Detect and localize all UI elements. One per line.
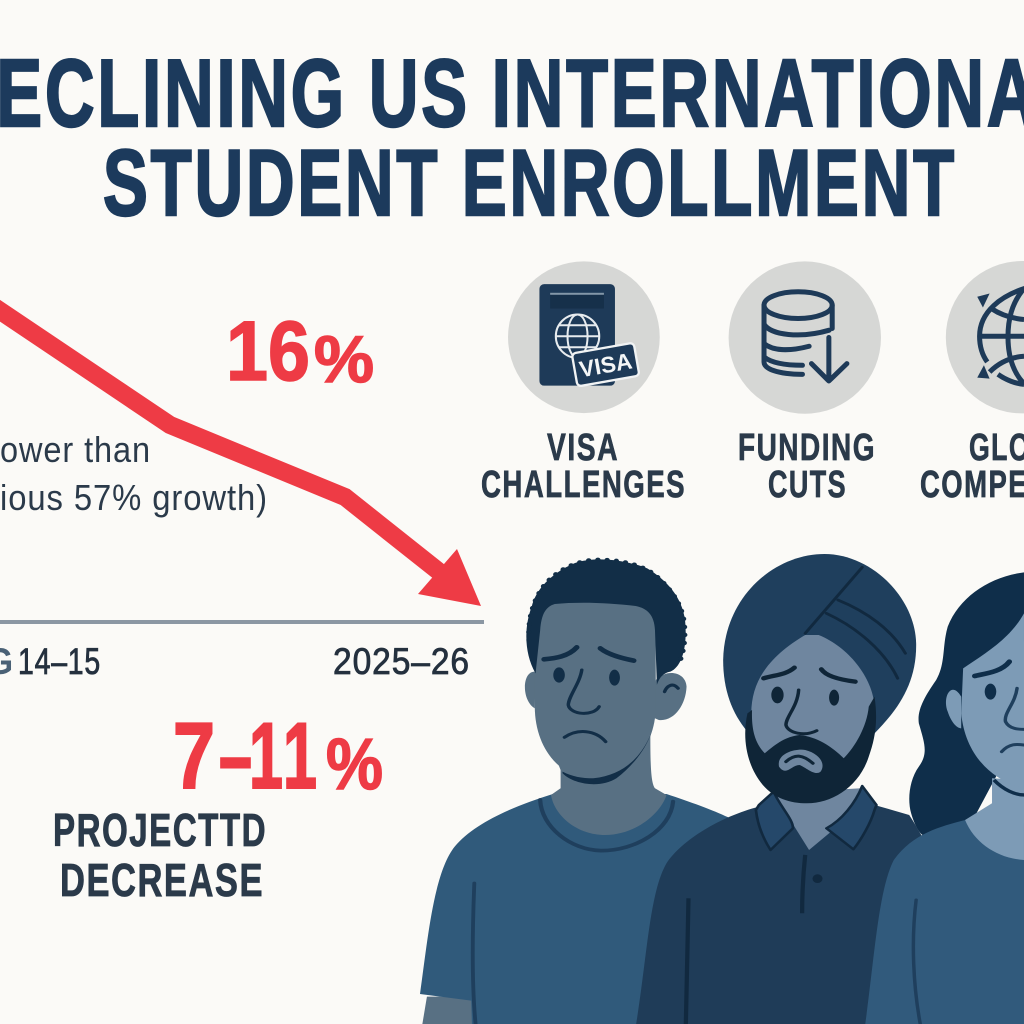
stat: 7-11%: 1 [249,703,283,808]
stat: 7-11%: % [326,725,383,805]
stat: 7-11%: 7 [173,703,215,808]
label: funding cuts [738,427,876,506]
chart axis [0,620,484,624]
person: man with turban and beard [636,554,928,1024]
note: lower than previous growth: ious 57% growth) [0,477,268,518]
person: woman [865,613,1024,1024]
stat: 7-11%: 1 [283,703,317,808]
axis label start: 14–15 [18,641,101,682]
label: visa challenges [481,427,686,506]
label: visa challenges: CHALLENGES [481,464,686,506]
stat: 16% [226,304,374,398]
icon: passport with visa [508,261,660,413]
illustration: three worried students [420,554,1024,1024]
icon: funding cuts stack with down arrow [729,261,881,414]
label: projected decrease [53,804,267,906]
label: visa challenges: VISA [547,427,619,469]
stat: 7-11%: – [219,703,252,808]
label: funding cuts: CUTS [768,464,847,506]
note: lower than previous growth [0,429,268,518]
stat: 7-11% [173,703,383,808]
axis label start [0,641,101,682]
stat: 16%: % [314,322,374,396]
label: funding cuts: FUNDING [738,427,876,469]
label: projected decrease: PROJECTTD [53,804,267,856]
person: woman hair behind [909,572,1024,837]
label: projected decrease: DECREASE [60,854,264,906]
title [0,40,1024,235]
chart: declining trend arrow [0,304,481,606]
person: man with curly hair [420,559,728,1024]
note: lower than previous growth: ower than [0,429,151,470]
label: global competition [920,427,1024,506]
icon: global competition globe [946,261,1024,413]
stat: 16%: 16 [226,304,310,398]
icon: passport with visa: VISA [577,348,634,382]
axis label end: 2025–26 [333,641,470,682]
